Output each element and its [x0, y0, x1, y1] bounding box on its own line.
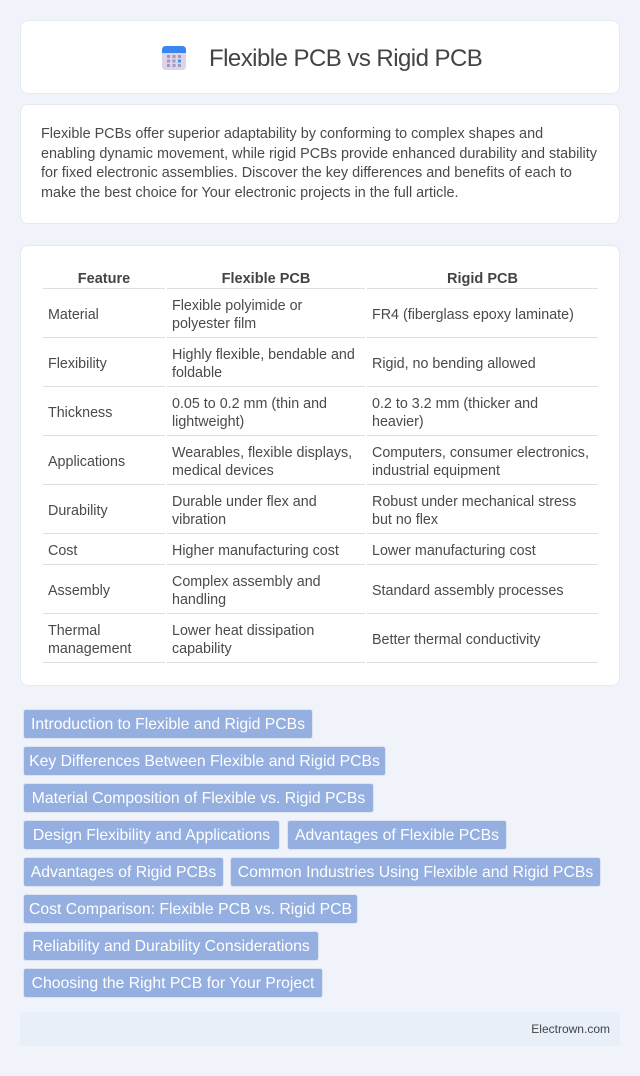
table rows: Complex assembly and [172, 574, 321, 590]
table rows: Lower heat dissipation [172, 623, 314, 639]
icon: calendar [162, 46, 186, 70]
tag: Introduction to Flexible and Rigid PCBs [31, 716, 305, 733]
title text: Flexible PCB vs Rigid PCB [209, 45, 482, 72]
tag: Reliability and Durability Considerations [32, 938, 310, 955]
tag: Material Composition of Flexible vs. Rigid PCBs [32, 790, 365, 807]
table rows: Flexibility [48, 356, 107, 372]
table rows: 0.2 to 3.2 mm (thicker and [372, 396, 538, 412]
tag: Key Differences Between Flexible and Rigid PCBs [29, 753, 380, 770]
table rows: management [48, 641, 131, 657]
panel: comparison table [20, 245, 620, 686]
tag [23, 746, 386, 776]
table rows: foldable [172, 365, 222, 381]
table rows: Thickness [48, 405, 112, 421]
table rows: Rigid, no bending allowed [372, 356, 536, 372]
tag list [23, 709, 601, 998]
table rows: medical devices [172, 463, 274, 479]
footer [20, 1012, 620, 1046]
table rows: Flexible polyimide or [172, 298, 302, 314]
intro text: Flexible PCBs offer superior adaptability by conforming to complex shapes and [41, 126, 543, 142]
table rows: FR4 (fiberglass epoxy laminate) [372, 307, 574, 323]
table rows: vibration [172, 512, 226, 528]
tag [23, 709, 313, 739]
footer credit: Electrown.com [531, 1022, 610, 1036]
tag: Design Flexibility and Applications [33, 827, 270, 844]
table rows: Standard assembly processes [372, 583, 564, 599]
table rows: Wearables, flexible displays, [172, 445, 352, 461]
table rows: Thermal [48, 623, 100, 639]
table rows: lightweight) [172, 414, 244, 430]
intro text: make the best choice for Your electronic projects in the full article. [41, 184, 459, 200]
table rows: 0.05 to 0.2 mm (thin and [172, 396, 327, 412]
tag [23, 931, 319, 961]
table rows: capability [172, 641, 232, 657]
tag [23, 894, 358, 924]
table rows: Material [48, 307, 99, 323]
tag: Choosing the Right PCB for Your Project [32, 975, 314, 992]
tag: Common Industries Using Flexible and Rigid PCBs [238, 864, 593, 881]
table rows: but no flex [372, 512, 438, 528]
table rows: Assembly [48, 583, 110, 599]
intro text: for fixed electronic assemblies. Discover the key differences and benefits of each to [41, 165, 572, 181]
table rows: Higher manufacturing cost [172, 543, 339, 559]
table rows: handling [172, 592, 226, 608]
table rows: Applications [48, 454, 125, 470]
intro text [41, 126, 597, 200]
table header [78, 271, 518, 287]
table header: Rigid PCB [447, 271, 518, 287]
tag [230, 857, 601, 887]
tag [23, 968, 323, 998]
intro text: enabling dynamic movement, while rigid PCBs provide enhanced durability and stability [41, 146, 597, 162]
panel: intro [20, 104, 620, 224]
table rows: Computers, consumer electronics, [372, 445, 589, 461]
table rows: industrial equipment [372, 463, 500, 479]
table rows: Durable under flex and [172, 494, 317, 510]
tag [23, 783, 374, 813]
table rows: Durability [48, 503, 108, 519]
table rows: Better thermal conductivity [372, 632, 540, 648]
table rows [43, 288, 598, 663]
tag [23, 857, 224, 887]
table header: Flexible PCB [222, 271, 310, 287]
tag: Cost Comparison: Flexible PCB vs. Rigid PCB [29, 901, 352, 918]
table rows: Robust under mechanical stress [372, 494, 576, 510]
tag: Advantages of Rigid PCBs [31, 864, 216, 881]
table rows: Cost [48, 543, 77, 559]
table rows: Highly flexible, bendable and [172, 347, 355, 363]
table rows: polyester film [172, 316, 256, 332]
table header: Feature [78, 271, 130, 287]
tag [23, 820, 280, 850]
table rows: Lower manufacturing cost [372, 543, 536, 559]
panel: title [20, 20, 620, 94]
tag [287, 820, 507, 850]
tag: Advantages of Flexible PCBs [295, 827, 499, 844]
table rows: heavier) [372, 414, 424, 430]
